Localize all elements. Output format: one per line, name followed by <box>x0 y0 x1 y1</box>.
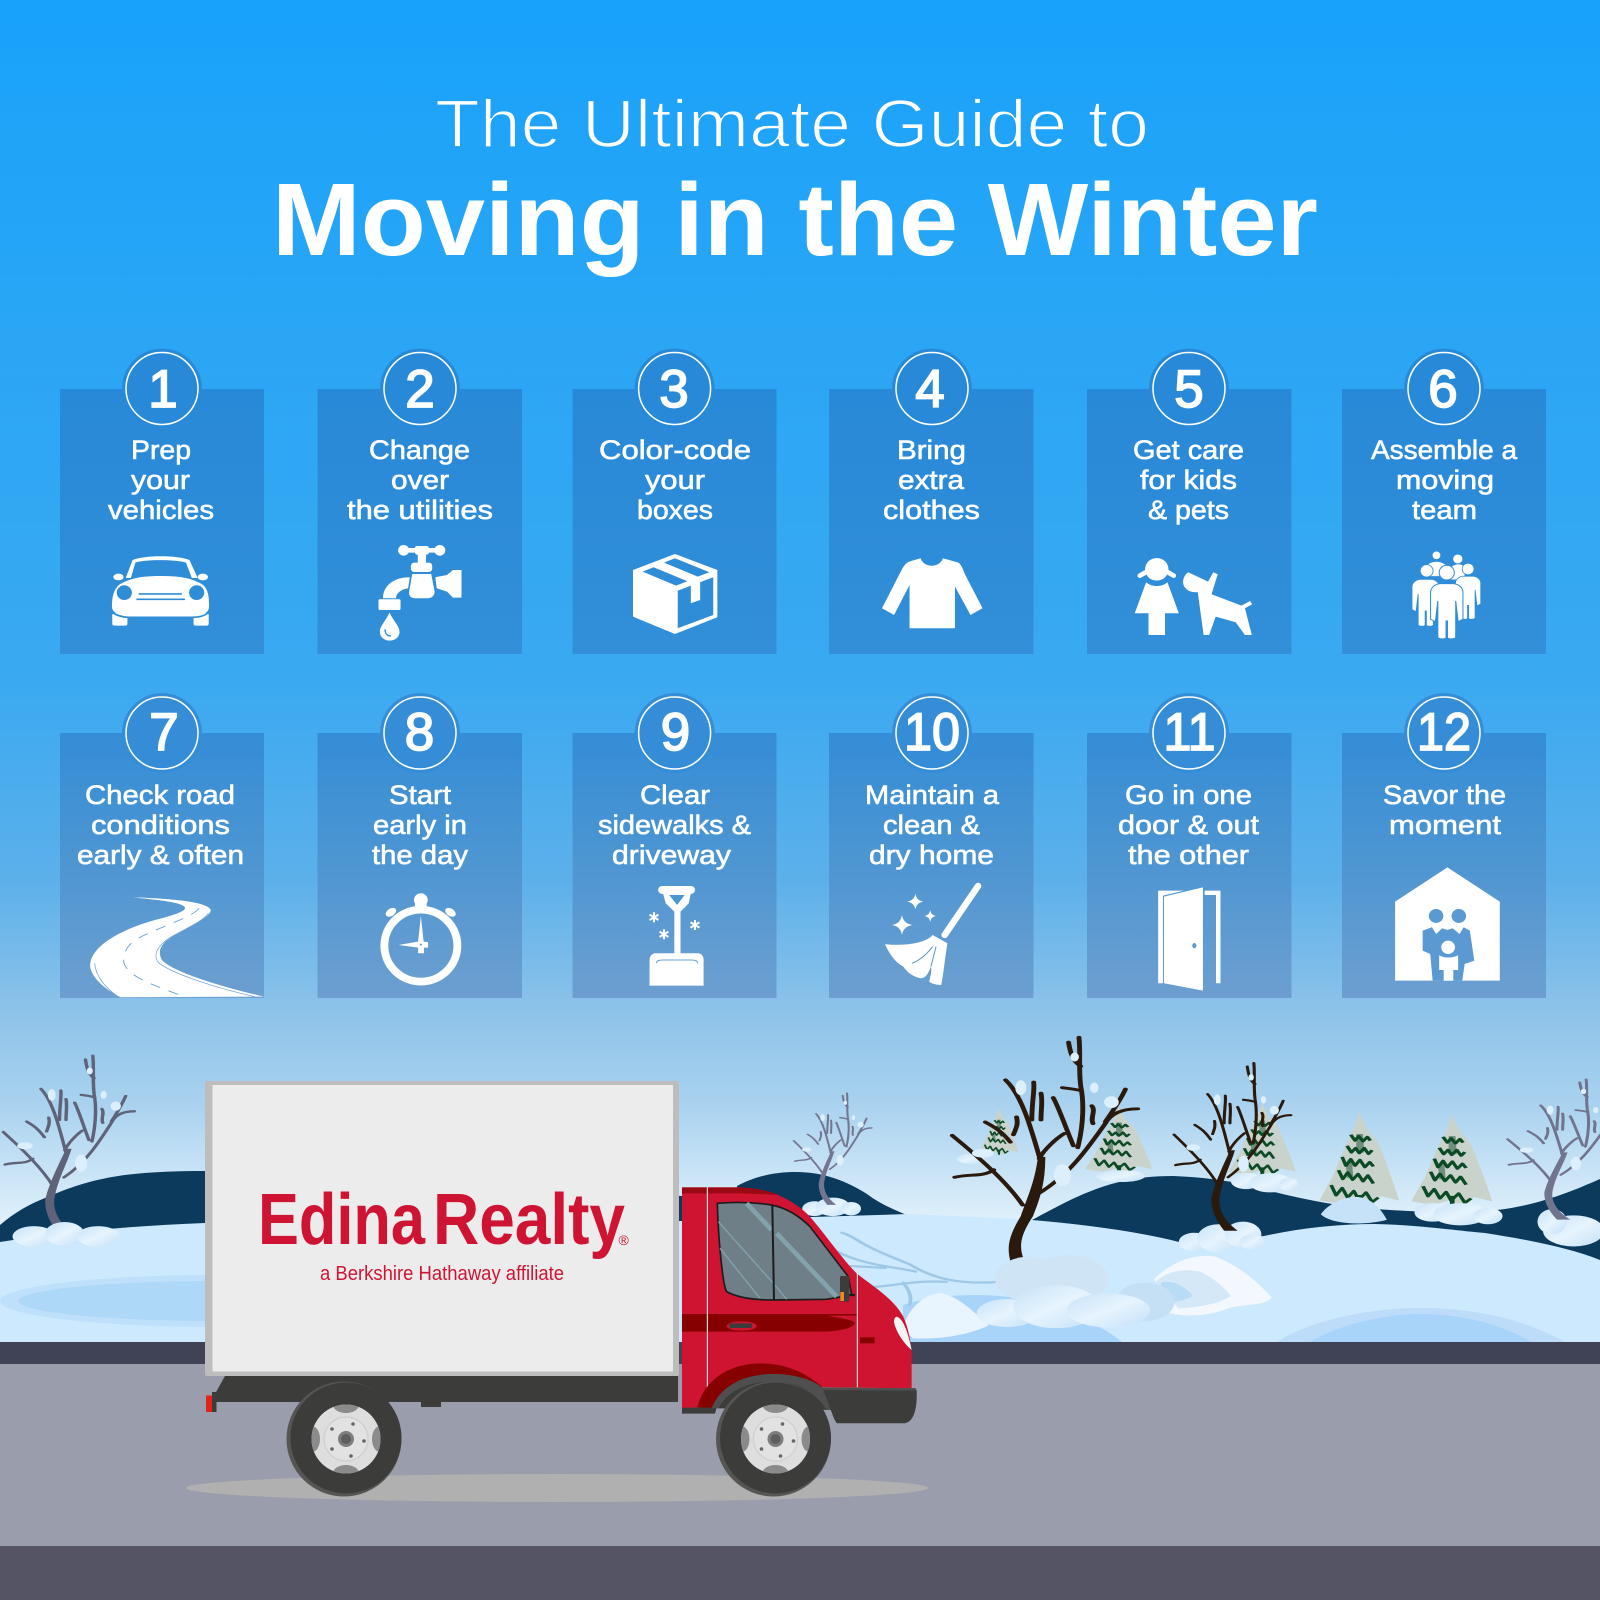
panel: 7 check road conditions: Check road <box>85 780 235 810</box>
panel: 3 color-code your boxes: 3 <box>659 360 689 419</box>
title line 1: The Ultimate Guide to <box>435 86 1149 162</box>
panel: 6 assemble a moving team: moving <box>1396 465 1494 495</box>
panel: 10 maintain a clean and dry home <box>829 693 1034 998</box>
logo: Edina Realty <box>258 1180 630 1285</box>
road <box>0 1342 1600 1600</box>
panel: 12 savor the moment: Savor the <box>1383 780 1506 810</box>
panel: 5 get care for kids and pets: & pets <box>1148 495 1229 525</box>
panel: 12 savor the moment: 12 <box>1417 703 1471 762</box>
truck cab <box>682 1187 917 1423</box>
panel: 10 maintain a clean and dry home: Maintain a <box>865 780 1000 810</box>
panel: 11 go in one door and out the other: Go in one <box>1125 780 1252 810</box>
panel: 11 go in one door and out the other <box>1087 693 1292 998</box>
panel: 10 maintain a clean and dry home: clean & <box>883 810 980 840</box>
panel: 2 change over the utilities <box>318 348 522 654</box>
panel: 9 clear sidewalks and driveway: 9 <box>661 703 690 762</box>
icon: family in house <box>1395 867 1500 981</box>
wheel arch <box>697 1363 823 1408</box>
icon: child and dog <box>1135 558 1252 635</box>
panel: 4 bring extra clothes: Bring <box>897 435 966 465</box>
title line 2: Moving in the Winter <box>272 162 1318 277</box>
bare tree: large dark <box>952 1037 1138 1267</box>
panel: 4 bring extra clothes <box>829 348 1034 654</box>
panel: 8 start early in the day <box>318 693 522 998</box>
winter landscape <box>0 1037 1600 1342</box>
panel: 2 change over the utilities: Change <box>369 435 470 465</box>
left frozen pond <box>0 1275 430 1327</box>
panel: 3 color-code your boxes <box>572 348 776 654</box>
panel: 8 start early in the day: Start <box>389 780 452 810</box>
door stripe and handle <box>682 1314 857 1332</box>
panel: 8 start early in the day: the day <box>372 840 469 870</box>
panel: 7 check road conditions <box>60 693 264 998</box>
panel: 5 get care for kids and pets <box>1087 348 1292 654</box>
headlight <box>894 1317 912 1350</box>
icon: team of people <box>1412 551 1481 639</box>
logo: Edina Realty: Edina <box>258 1180 426 1260</box>
panel: 1 prep your vehicles: 1 <box>148 360 178 419</box>
icon: faucet <box>378 545 461 641</box>
panel: 11 go in one door and out the other: the other <box>1128 840 1249 870</box>
logo: Edina Realty: a Berkshire Hathaway affiliate <box>320 1263 564 1285</box>
bare tree: right grey <box>1508 1079 1600 1220</box>
snow mounds under trees <box>802 1154 1600 1252</box>
panel: 3 color-code your boxes: boxes <box>637 495 713 525</box>
logo: Edina Realty: Realty <box>433 1180 625 1260</box>
distant navy hills <box>0 1171 1600 1265</box>
tail light <box>206 1396 212 1412</box>
pine trees <box>979 1103 1492 1207</box>
centre frozen pond <box>903 1295 1122 1342</box>
icon: box <box>633 554 717 634</box>
panel: 4 bring extra clothes: clothes <box>883 495 980 525</box>
bare tree: distant grey <box>794 1093 872 1205</box>
icon: stopwatch <box>384 893 457 982</box>
panel: 1 prep your vehicles <box>60 348 264 654</box>
moving truck <box>205 1081 917 1496</box>
panel: 5 get care for kids and pets: Get care <box>1133 435 1244 465</box>
snow piles <box>903 1255 1272 1339</box>
panel: 9 clear sidewalks and driveway: sidewalks & <box>598 810 751 840</box>
panel: 3 color-code your boxes: Color-code <box>599 435 751 465</box>
bare tree: left grey <box>3 1056 134 1234</box>
left tree snow mound <box>12 1222 120 1247</box>
icon: sweater <box>882 558 983 628</box>
front bumper <box>823 1388 917 1423</box>
rear wheel <box>286 1382 402 1496</box>
panel: 3 color-code your boxes: your <box>645 465 705 495</box>
panel: 1 prep your vehicles: Prep <box>131 435 191 465</box>
snow ground <box>0 1214 1600 1342</box>
panel: 7 check road conditions: conditions <box>91 810 230 840</box>
title <box>272 86 1318 277</box>
panel: 5 get care for kids and pets: for kids <box>1140 465 1237 495</box>
icon: open door <box>1158 887 1220 991</box>
panel: 2 change over the utilities: the utilities <box>347 495 493 525</box>
panel: 8 start early in the day: 8 <box>405 703 434 762</box>
panel: 1 prep your vehicles: your <box>131 465 190 495</box>
panel: 6 assemble a moving team <box>1342 348 1546 654</box>
panel: 8 start early in the day: early in <box>373 810 467 840</box>
panel: 1 prep your vehicles: vehicles <box>108 495 214 525</box>
panel: 5 get care for kids and pets: 5 <box>1174 360 1204 419</box>
panel: 6 assemble a moving team: team <box>1412 495 1477 525</box>
panel: 9 clear sidewalks and driveway <box>572 693 776 998</box>
front wheel <box>716 1382 831 1496</box>
panel: 2 change over the utilities: 2 <box>405 360 435 419</box>
panel: 7 check road conditions: early & often <box>77 840 244 870</box>
bare tree: medium dark <box>1174 1063 1291 1231</box>
truck shadow <box>186 1474 928 1502</box>
panel: 4 bring extra clothes: 4 <box>915 360 945 419</box>
truck chassis <box>212 1376 678 1412</box>
cab window <box>717 1203 852 1300</box>
panel: 9 clear sidewalks and driveway: Clear <box>640 780 710 810</box>
fallen tree shadow <box>836 1233 998 1305</box>
scene elements on right <box>3 1037 1600 1339</box>
panel: 10 maintain a clean and dry home: dry home <box>869 840 994 870</box>
icon: winding road <box>90 897 264 997</box>
panel: 12 savor the moment <box>1342 693 1546 998</box>
panel: 6 assemble a moving team: 6 <box>1428 360 1458 419</box>
panel: 7 check road conditions: 7 <box>149 703 179 762</box>
mirror <box>840 1276 855 1302</box>
panel: 11 go in one door and out the other: 11 <box>1164 703 1216 762</box>
icon: broom and sparkles <box>885 886 978 985</box>
icon: car <box>112 556 209 626</box>
panel: 9 clear sidewalks and driveway: driveway <box>612 840 732 870</box>
icon: snow shovel <box>650 886 704 986</box>
panel: 12 savor the moment: moment <box>1389 810 1502 840</box>
right frozen pond <box>1277 1308 1565 1342</box>
logo: Edina Realty: ® <box>618 1232 630 1248</box>
panel: 2 change over the utilities: over <box>391 465 449 495</box>
cargo box <box>205 1081 679 1376</box>
panel: 6 assemble a moving team: Assemble a <box>1371 435 1518 465</box>
panel: 10 maintain a clean and dry home: 10 <box>904 703 960 762</box>
panel: 11 go in one door and out the other: door & out <box>1118 810 1260 840</box>
panel: 4 bring extra clothes: extra <box>898 465 965 495</box>
